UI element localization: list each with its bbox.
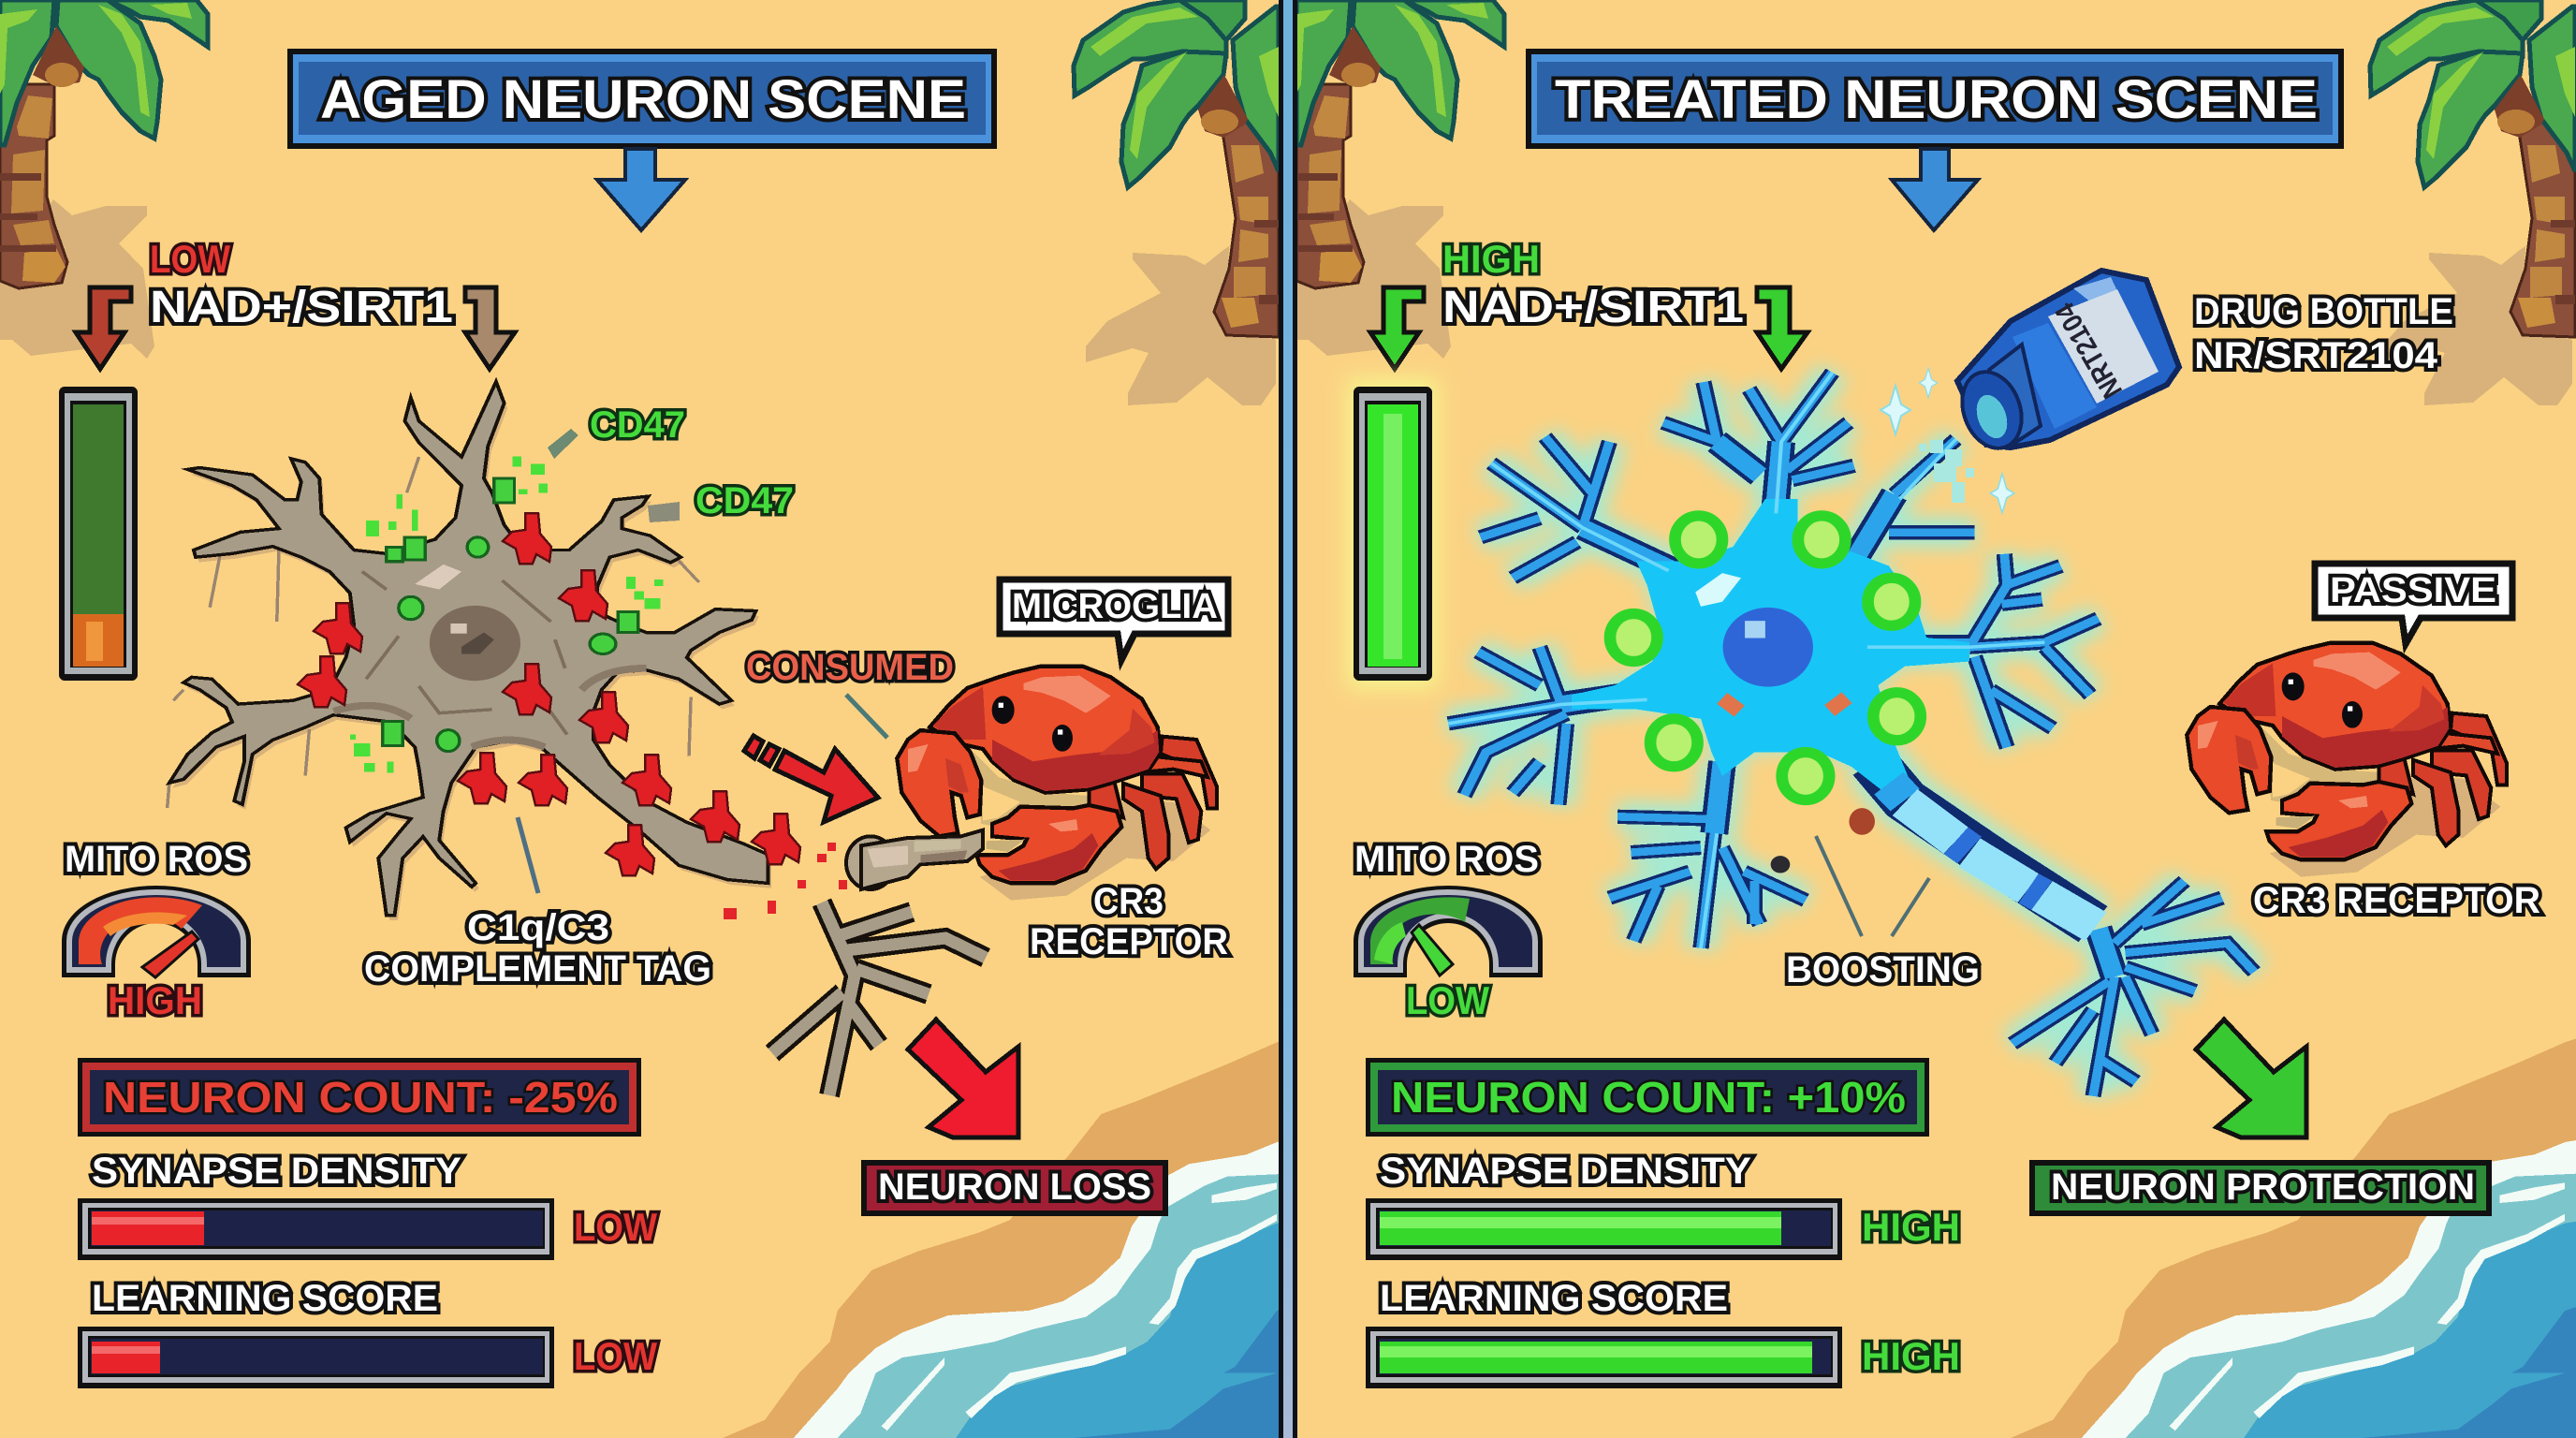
gauge: mito ros high [66,889,247,977]
speech bubble: microglia [1000,580,1228,660]
bar: synapse density high [1366,1198,1842,1260]
pointers: boosting [1816,836,1929,936]
label: low: LOW [1406,978,1489,1022]
bottle label text: NRT2104 [2049,297,2129,404]
arrow: big green down-right [2196,1020,2306,1137]
label: mito ros: MITO ROS [65,839,248,880]
label: NAD+/SIRT1: NAD+/SIRT1 [150,283,453,332]
title banner: aged neuron scene [287,49,997,149]
illustration: treated neuron [1448,373,2254,1096]
panel: neuron count +10% [1366,1058,1929,1137]
label: complement tag: COMPLEMENT TAG [364,948,711,990]
outcome: neuron protection [2029,1160,2492,1216]
label: drug bottle: DRUG BOTTLE [2194,291,2453,332]
debris bits [724,843,847,919]
label: consumed: CONSUMED [746,647,954,688]
nucleus [430,606,520,681]
label: high level: HIGH [1442,237,1540,281]
nucleus [1723,608,1813,687]
title banner: aged neuron scene: AGED NEURON SCENE [320,69,966,130]
CD47 sparks [350,456,664,773]
beach and waves, left panel [723,1036,1296,1438]
title banner: treated neuron scene: TREATED NEURON SCENE [1555,69,2318,130]
label: learning score: LEARNING SCORE [92,1278,438,1319]
label: CD47 lower: CD47 [695,480,794,521]
neuron glow [1448,373,2254,1096]
speech bubble: microglia: MICROGLIA [1012,587,1218,626]
label: low level: LOW [150,237,230,281]
arrow: title down [1892,149,1978,230]
dendrite highlights [1448,373,2044,948]
label: high: HIGH [108,978,202,1022]
illustration: crab passive [2187,643,2507,877]
sand, right panel [1288,0,2576,1438]
arrow: green down right [1757,287,1808,369]
arrow: big red down-right [908,1020,1018,1137]
icon: palm tree top left [0,0,208,359]
bar: learning score low [78,1327,554,1388]
pointer: complement tag [518,817,538,893]
illustration: drug bottle [1952,271,2179,457]
pointer: CD47 lower [648,502,680,522]
glow: vertical bar [1348,379,1438,688]
outcome: neuron protection: NEURON PROTECTION [2051,1167,2475,1208]
label: synapse density: SYNAPSE DENSITY [1380,1151,1751,1192]
panel: neuron count +10%: NEURON COUNT: +10% [1391,1073,1906,1122]
panel divider [1279,0,1297,1438]
label: CD47 upper: CD47 [590,404,685,446]
spray sparkles [1881,368,2014,513]
value: learning low: LOW [574,1334,657,1378]
panel: aged neuron scene [0,0,1296,1438]
panel: neuron count -25% [78,1058,641,1137]
icon: palm tree top right [1074,0,1279,405]
illustration: crab microglia [897,667,1217,901]
value: learning high: HIGH [1862,1334,1960,1378]
title banner: treated neuron scene [1526,49,2344,149]
arrow: red down [76,287,131,369]
arrow: title down [597,149,685,230]
axon myelin segments [1889,784,2096,927]
arrow: red consumed arrow [744,736,878,822]
bar: synapse density low [78,1198,554,1260]
icon: palm tree top left [1296,0,1504,359]
label: boosting: BOOSTING [1786,949,1980,990]
label: CR3 receptor: CR3 RECEPTOR [2253,880,2540,921]
label: C1q/C3: C1q/C3 [467,907,609,948]
label: synapse density: SYNAPSE DENSITY [92,1151,461,1192]
icon: palm tree top right [2370,0,2575,405]
value: synapse low: LOW [574,1205,657,1249]
gauge: NAD+ vertical bar, low [59,387,138,681]
CD47 markers [383,478,638,752]
arrow: green down left [1370,287,1424,369]
gauge: NAD+ vertical bar, high [1354,387,1432,681]
mitochondria and dots [1717,692,1875,873]
illustration: severed dendrite [772,902,986,1095]
value: synapse high: HIGH [1862,1205,1960,1249]
dangling fibres [168,457,699,808]
label: NR/SRT2104: NR/SRT2104 [2194,335,2438,376]
axon fragment held by crab [846,830,983,889]
panel: treated neuron scene [1288,0,2576,1438]
label: receptor: RECEPTOR [1030,921,1228,962]
pointer: consumed [846,695,887,738]
speech bubble: passive [2315,564,2512,644]
label: CR3: CR3 [1093,881,1164,922]
bar: learning score high [1366,1327,1842,1388]
speech bubble: passive: PASSIVE [2330,571,2496,610]
pointer: CD47 upper [548,429,578,459]
panel: neuron count -25%: NEURON COUNT: -25% [103,1073,618,1122]
outcome: neuron loss: NEURON LOSS [878,1167,1151,1208]
gauge: mito ros low [1357,889,1539,976]
CD47 green circles [1610,516,1921,800]
arrow: brown down [465,287,515,369]
label: learning score: LEARNING SCORE [1380,1278,1728,1319]
label: NAD+/SIRT1: NAD+/SIRT1 [1442,283,1744,332]
beach and waves, right panel [2011,1036,2576,1438]
label: mito ros: MITO ROS [1354,839,1539,880]
complement tags [298,513,800,875]
outcome: neuron loss [861,1160,1168,1216]
illustration: aged neuron [168,382,800,920]
